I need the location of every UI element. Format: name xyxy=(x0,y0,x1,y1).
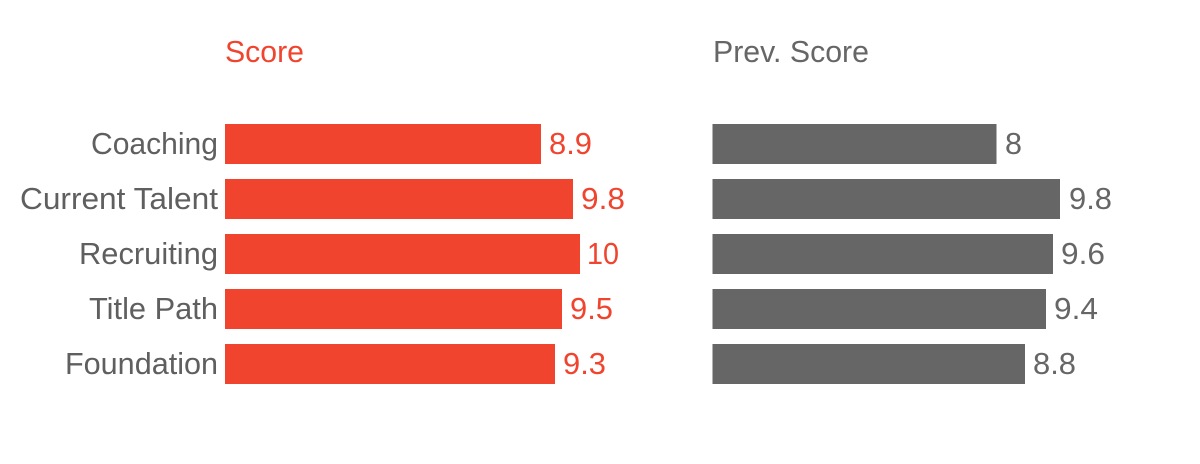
label: Foundation: Foundation xyxy=(65,346,218,381)
bar: Current Talent previous score xyxy=(712,179,1060,219)
heading: Score: Score xyxy=(225,34,304,69)
value: Title Path score: 9.5 xyxy=(570,291,613,326)
bar: Foundation previous score xyxy=(712,344,1025,384)
label: Title Path: Title Path xyxy=(89,291,218,326)
label: Coaching: Coaching xyxy=(91,126,218,161)
value: Current Talent score: 9.8 xyxy=(581,181,625,216)
value: Foundation previous score: 8.8 xyxy=(1033,346,1076,381)
value: Current Talent previous score: 9.8 xyxy=(1069,181,1112,216)
label: Current Talent: Current Talent xyxy=(20,181,218,216)
value: Title Path previous score: 9.4 xyxy=(1054,291,1098,326)
bar: Title Path previous score xyxy=(712,289,1046,329)
bar: Coaching previous score xyxy=(712,124,996,164)
bar: Recruiting previous score xyxy=(712,234,1053,274)
bar: Current Talent score xyxy=(225,179,573,219)
bar: Recruiting score xyxy=(225,234,580,274)
value: Coaching score: 8.9 xyxy=(549,126,592,161)
panel: Score bar chart xyxy=(225,34,625,384)
bar: Title Path score xyxy=(225,289,562,329)
panel: Prev. Score bar chart xyxy=(712,34,1112,384)
label: Recruiting: Recruiting xyxy=(79,236,218,271)
value: Recruiting score: 10 xyxy=(587,236,619,271)
heading: Prev. Score: Prev. Score xyxy=(713,34,869,69)
value: Coaching previous score: 8 xyxy=(1005,126,1022,161)
value: Foundation score: 9.3 xyxy=(563,346,606,381)
bar: Foundation score xyxy=(225,344,555,384)
bar: Coaching score xyxy=(225,124,541,164)
panel: category labels xyxy=(20,126,218,381)
value: Recruiting previous score: 9.6 xyxy=(1061,236,1105,271)
